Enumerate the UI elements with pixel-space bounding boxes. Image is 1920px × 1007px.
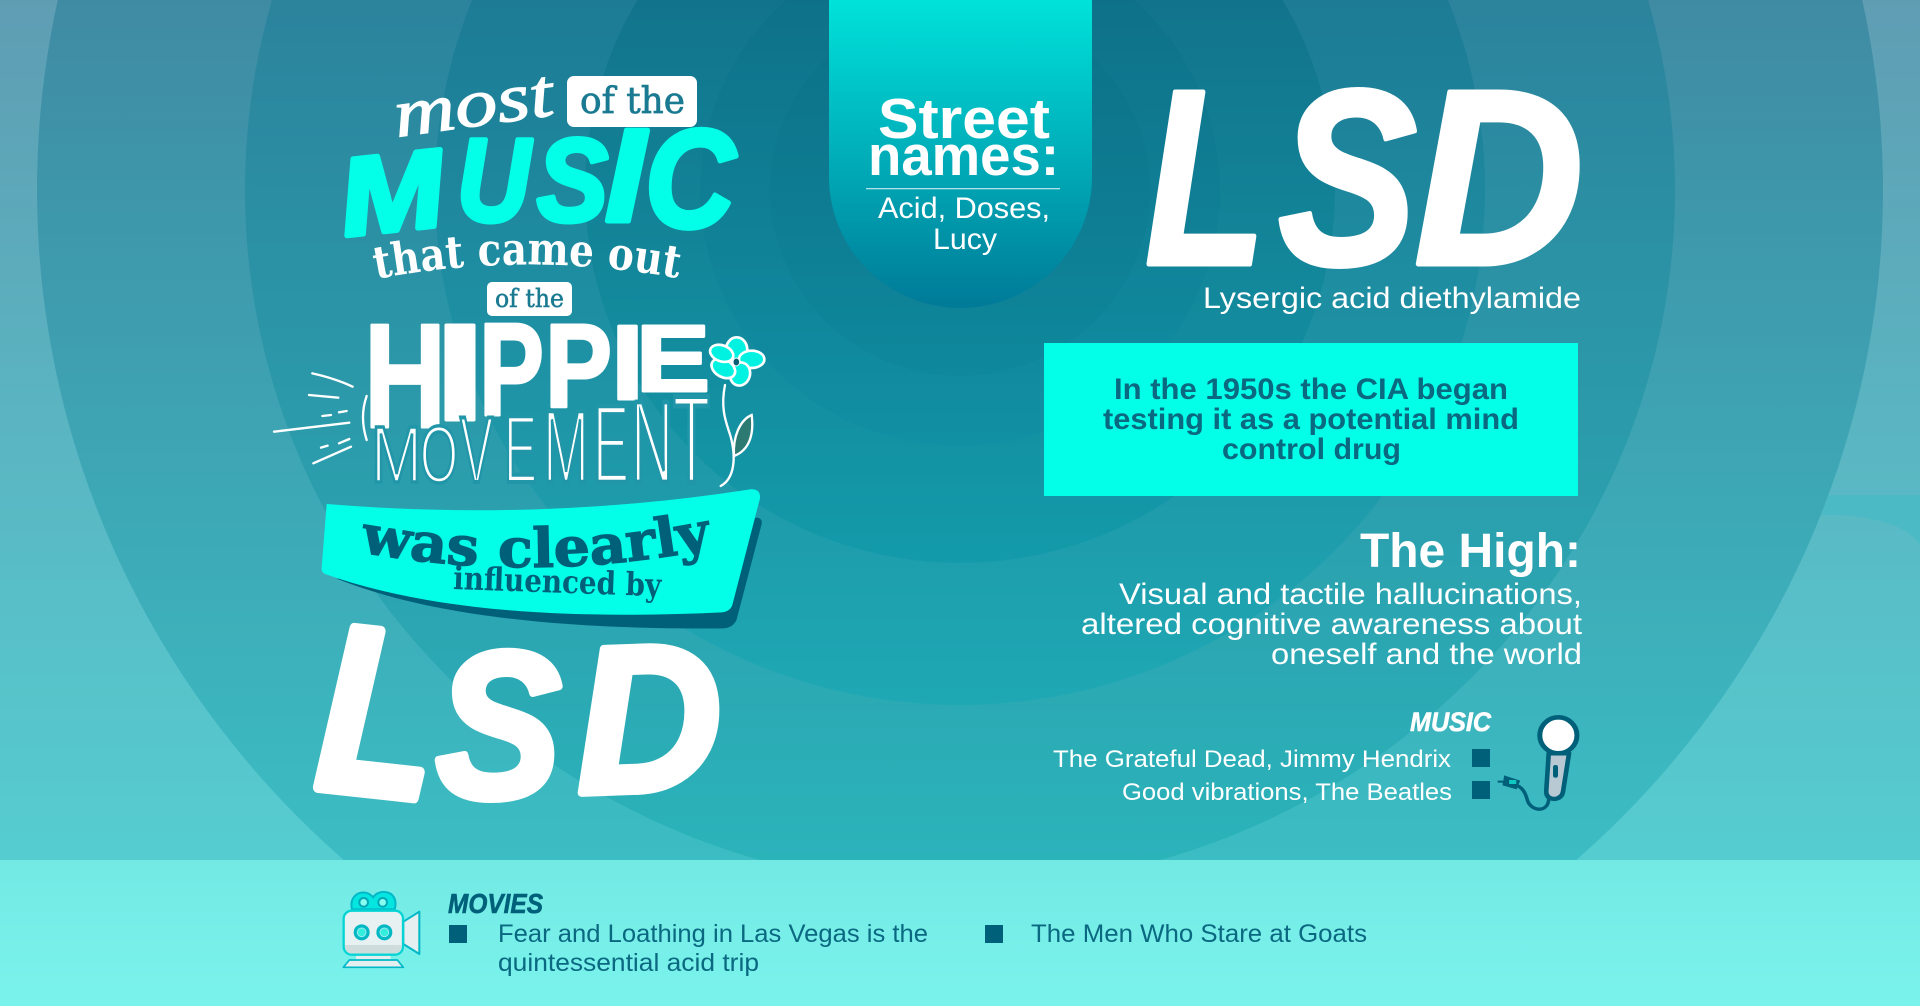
banner: was clearly influenced by: was clearly — [362, 514, 710, 568]
icon: flower — [708, 337, 764, 486]
MUSIC: U — [457, 115, 532, 247]
title: LSD: L — [1145, 38, 1266, 317]
that came out: that came out — [372, 237, 680, 278]
icon: movie camera — [343, 892, 419, 967]
movie text one: quintessential acid trip — [498, 949, 759, 977]
panel: movies: MOVIES — [448, 888, 543, 919]
MOVEMENT: E — [593, 383, 629, 506]
MUSIC: C — [645, 100, 737, 257]
MUSIC: M — [333, 125, 454, 260]
callout: CIA: testing it as a potential mind — [1103, 403, 1519, 436]
movie text one — [498, 920, 928, 977]
title: LSD: S — [1278, 38, 1417, 317]
HIPPIE: I — [611, 304, 644, 422]
music list: Good vibrations, The Beatles — [1122, 779, 1452, 806]
panel: street names — [829, 0, 1092, 308]
the high description: oneself and the world — [1271, 638, 1582, 671]
street names list: Acid, Doses, — [878, 192, 1050, 225]
HIPPIE: E — [636, 306, 710, 412]
the high description: Visual and tactile hallucinations, — [1119, 578, 1582, 611]
HIPPIE: P — [479, 296, 544, 443]
MOVEMENT: N — [631, 377, 673, 507]
street names list — [878, 192, 1050, 256]
street names list: Lucy — [933, 223, 997, 256]
panel: music: MUSIC — [1410, 707, 1491, 737]
movie text one: Fear and Loathing in Las Vegas is the — [498, 920, 928, 948]
MUSIC: I — [605, 102, 648, 249]
the high description: altered cognitive awareness about — [1081, 608, 1583, 641]
MOVEMENT: M — [371, 410, 422, 499]
MOVEMENT: M — [543, 389, 589, 504]
MOVEMENT: E — [504, 396, 537, 503]
music list: The Grateful Dead, Jimmy Hendrix — [1053, 746, 1451, 773]
MOVEMENT: O — [420, 410, 458, 500]
HIPPIE: I — [434, 296, 486, 450]
MUSIC: S — [537, 115, 608, 247]
panel: movies — [343, 888, 1367, 977]
callout: CIA — [1044, 343, 1578, 496]
the high description — [1081, 578, 1583, 671]
street names heading: Street — [878, 87, 1050, 151]
panel: music — [1053, 707, 1577, 809]
HIPPIE: P — [545, 300, 612, 433]
LSD large lettering left: D — [571, 601, 725, 838]
callout: CIA: In the 1950s the CIA began — [1114, 373, 1508, 406]
icon: microphone — [1498, 717, 1577, 809]
title: LSD: D — [1414, 38, 1584, 317]
subtitle: Lysergic acid diethylamide — [1203, 282, 1581, 315]
LSD large lettering left: S — [436, 610, 561, 842]
speed lines — [274, 373, 367, 463]
panel: the high: The High: — [1360, 525, 1581, 578]
of the small tag: of the — [495, 284, 564, 313]
movie text two: The Men Who Stare at Goats — [1031, 920, 1367, 948]
MOVEMENT: V — [460, 397, 493, 502]
headline lettering — [272, 54, 766, 848]
HIPPIE: H — [364, 294, 446, 459]
banner: was clearly influenced by — [322, 489, 762, 628]
bottom band — [0, 860, 1920, 1006]
of the tag — [567, 76, 697, 127]
callout: CIA: control drug — [1222, 433, 1401, 466]
LSD large lettering left: L — [310, 575, 448, 848]
most: most — [389, 54, 560, 152]
headline lettering: T — [673, 371, 710, 509]
of the tag: of the — [580, 81, 685, 122]
street names heading — [868, 87, 1059, 188]
music list — [1053, 746, 1452, 806]
banner: was clearly influenced by: influenced by — [453, 559, 663, 604]
street names heading: names: — [868, 124, 1059, 188]
panel: the high — [1081, 525, 1583, 671]
